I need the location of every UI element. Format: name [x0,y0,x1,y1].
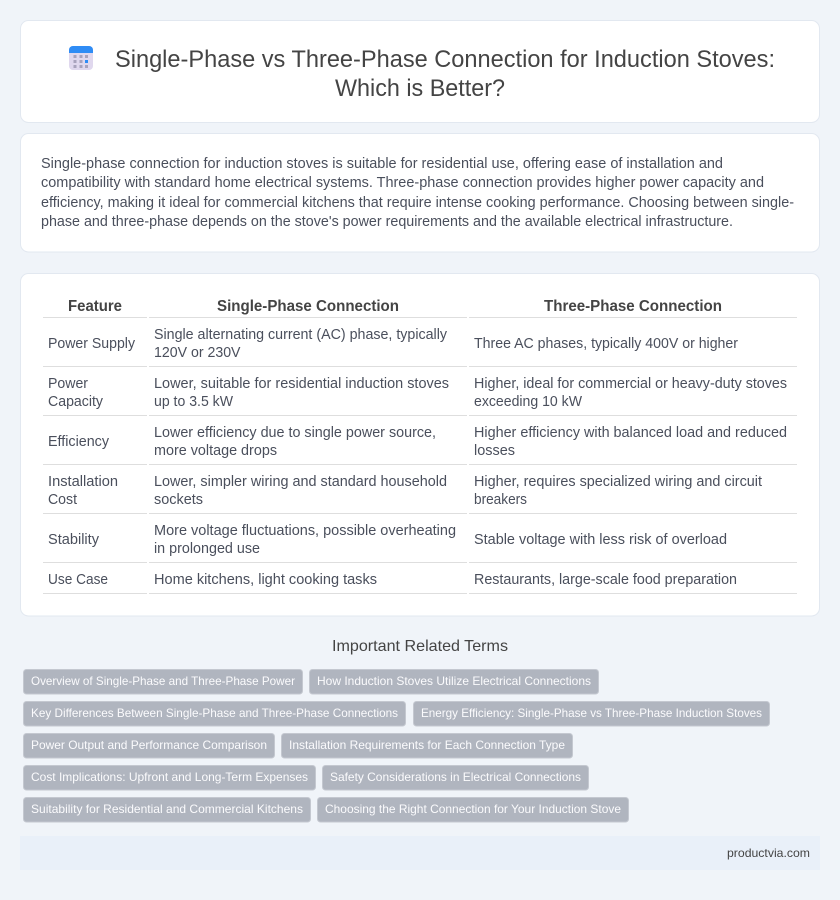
title: Which is Better? [335,75,505,102]
tag: choosing the right connection: Choosing the Right Connection for Your Induction Stove [325,802,621,816]
table row: use case: Restaurants, large-scale food preparation [474,572,737,588]
heading: important related terms: Important Related Terms [332,638,508,655]
tag: how induction stoves utilize connections: How Induction Stoves Utilize Electrical Connections [317,674,591,688]
table row: power capacity: Power [48,376,88,392]
table row: installation cost: Higher, requires specialized wiring and circuit [474,474,762,490]
panel: title header [20,20,820,122]
tag: how induction stoves utilize connections [310,670,598,694]
table row: stability: Stability [48,532,100,548]
table row: power supply: 120V or 230V [154,345,241,361]
title [115,46,775,102]
tag: key differences [24,702,406,726]
tag: overview: Overview of Single-Phase and Three-Phase Power [31,674,295,688]
tag: safety considerations [322,766,588,790]
table row: efficiency: losses [474,443,515,459]
tag: power output: Power Output and Performance Comparison [31,738,267,752]
title: Single-Phase vs Three-Phase Connection for Induction Stoves: [115,46,775,73]
text block: introduction paragraph: efficiency, making it ideal for commercial kitchens that require intense cooking performance. Choosing between single- [41,195,794,211]
panel: comparison table [20,274,820,616]
tag: suitability: Suitability for Residential and Commercial Kitchens [31,802,303,816]
footer: productvia.com [727,846,810,860]
table row: efficiency: Higher efficiency with balanced load and reduced [474,425,787,441]
table row: power supply: Single alternating current (AC) phase, typically [154,327,448,343]
table row: power supply [48,327,738,361]
table row: efficiency: more voltage drops [154,443,277,459]
text block: introduction paragraph: Single-phase connection for induction stoves is suitable for residential use, offering ease of installation and [41,156,723,172]
footer [20,836,820,870]
table row: efficiency: Lower efficiency due to single power source, [154,425,436,441]
table row: installation cost [48,474,762,508]
tag: installation requirements [282,734,572,758]
table row: efficiency [48,425,787,459]
table row: installation cost: Installation [48,474,118,490]
tag: power output [24,734,274,758]
table row: power capacity: Higher, ideal for commercial or heavy-duty stoves [474,376,787,392]
table row: installation cost: breakers [474,492,527,508]
table row: efficiency: Efficiency [48,434,110,450]
table header row [68,298,722,315]
table header row: Single-Phase Connection [217,298,399,315]
table row: installation cost: Lower, simpler wiring and standard household [154,474,447,490]
table row: stability [48,523,727,557]
tag: cost implications [24,766,316,790]
tag: installation requirements: Installation Requirements for Each Connection Type [289,738,565,752]
panel: introduction [20,134,820,252]
text block: introduction paragraph [41,156,794,230]
table row: power capacity: Lower, suitable for residential induction stoves [154,376,449,392]
tag: cost implications: Cost Implications: Upfront and Long-Term Expenses [31,770,308,784]
table row: power capacity [48,376,787,410]
tag: choosing the right connection [318,798,628,822]
table row: stability: Stable voltage with less risk of overload [474,532,727,548]
table row: use case [48,572,737,588]
icon: calendar [69,46,93,70]
table row: power capacity: Capacity [48,394,104,410]
panel: related term tags [24,670,770,822]
text block: introduction paragraph: compatibility with standard home electrical systems. Three-phase connection provides higher power capacity and [41,175,764,191]
tag: suitability [24,798,310,822]
tag: key differences: Key Differences Between Single-Phase and Three-Phase Connections [31,706,398,720]
table row: use case: Use Case [48,572,108,588]
table header row: Feature [68,298,122,315]
table row: use case: Home kitchens, light cooking tasks [154,572,377,588]
table header row: Three-Phase Connection [544,298,722,315]
table row: power supply: Power Supply [48,336,136,352]
table row: stability: in prolonged use [154,541,260,557]
table row: power capacity: exceeding 10 kW [474,394,582,410]
table row: installation cost: sockets [154,492,203,508]
table row: power supply: Three AC phases, typically 400V or higher [474,336,738,352]
tag: overview [24,670,302,694]
table row: stability: More voltage fluctuations, possible overheating [154,523,456,539]
tag: energy efficiency [414,702,770,726]
table row: power capacity: up to 3.5 kW [154,394,233,410]
text block: introduction paragraph: phase and three-phase depends on the stove's power requirements and the available electrical infrastructure. [41,214,733,230]
tag: energy efficiency: Energy Efficiency: Single-Phase vs Three-Phase Induction Stoves [421,706,762,720]
table row: installation cost: Cost [48,492,77,508]
tag: safety considerations: Safety Considerations in Electrical Connections [330,770,581,784]
